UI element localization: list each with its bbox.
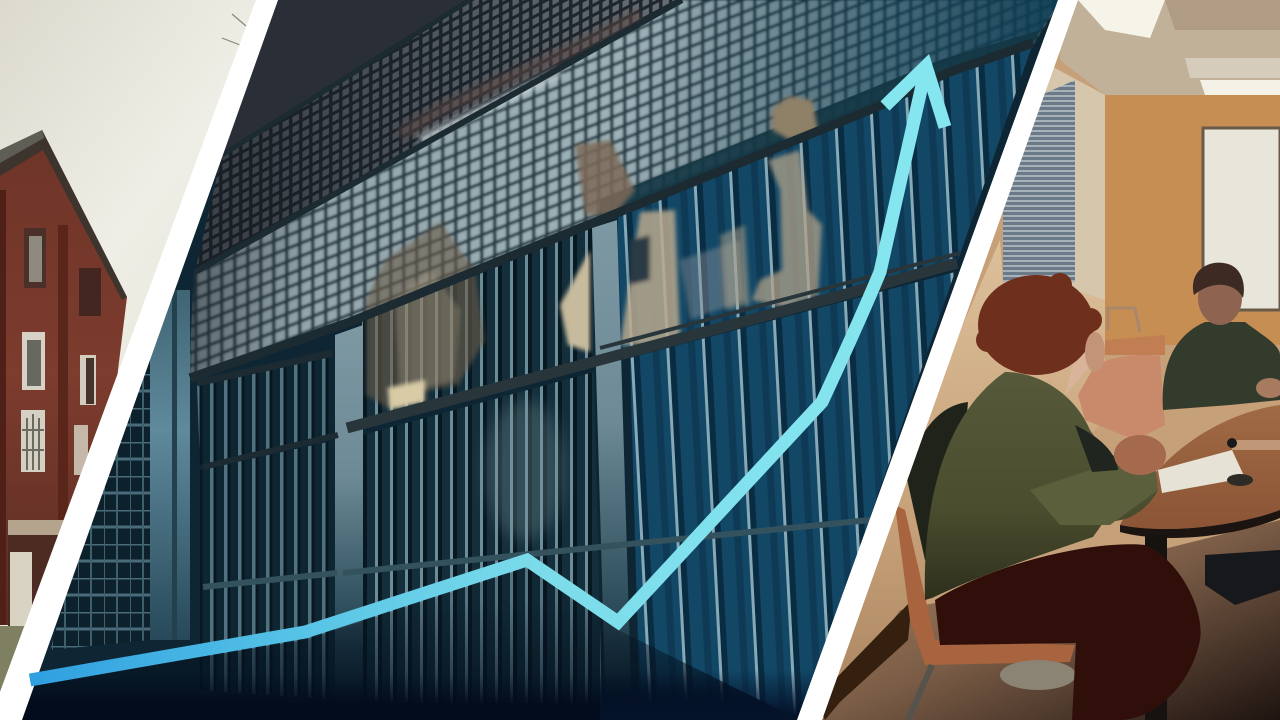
table: [1120, 405, 1280, 720]
divider: right white diagonal stripe: [797, 0, 1078, 720]
left barred window section: [50, 290, 190, 650]
back wall: [1105, 95, 1280, 345]
upper bar panels: [362, 30, 1040, 420]
person: woman with curly red hair: [905, 273, 1201, 720]
columns and rails: [190, 0, 1033, 720]
person: man in green sweater: [1163, 263, 1280, 410]
chair: pink chair by table: [1065, 308, 1165, 440]
window with blinds: [1000, 60, 1105, 310]
dark region below the trend line: [0, 568, 800, 720]
ground: grass: [0, 626, 24, 692]
floor: [822, 520, 1280, 720]
side wall: [820, 240, 1105, 720]
arrow: rising trend line: [30, 66, 945, 680]
panel: brick prison building: [0, 0, 260, 701]
baseboard shadow: [823, 604, 910, 720]
dark upper-left ceiling: [222, 0, 470, 155]
peeling debris patches: [366, 96, 822, 410]
chair: foreground seat: [895, 505, 1076, 720]
whiteboard: [1203, 128, 1280, 310]
fog in lower middle bars: [485, 400, 565, 540]
ceiling with lights: [1060, 0, 1280, 95]
building: red brick facade: [0, 130, 127, 627]
divider: left white diagonal stripe: [0, 0, 278, 720]
panel: meeting room: [800, 0, 1280, 720]
brown peeling band over mesh: [400, 15, 640, 135]
lower bar panels: [197, 272, 955, 720]
wire mesh upper: [190, 0, 1060, 378]
